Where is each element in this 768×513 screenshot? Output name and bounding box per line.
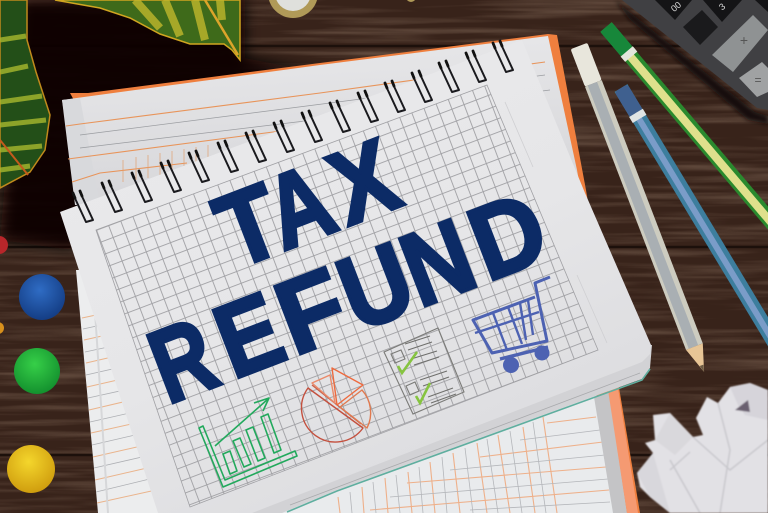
calculator: + [740, 32, 748, 48]
coin [268, 0, 318, 18]
heading: REFUND [134, 168, 562, 426]
calculator: 00 [669, 0, 683, 14]
heading: REFUND: D [454, 169, 562, 303]
heading: REFUND: U [323, 221, 429, 354]
pencil: white and grey [571, 43, 712, 375]
heading: TAX: T [201, 162, 297, 291]
icon: pie chart [301, 368, 371, 442]
candy: yellow [7, 445, 55, 493]
plant leaf left [0, 0, 50, 188]
calculator: = [754, 73, 762, 87]
pencil: green [600, 22, 768, 250]
crumpled paper [637, 383, 768, 513]
heading: REFUND: F [261, 246, 362, 377]
candy: blue [19, 274, 65, 320]
calculator: 3 [717, 1, 727, 12]
main notebook page [60, 40, 651, 513]
heading: REFUND: N [386, 196, 489, 329]
underlying page [62, 36, 600, 330]
heading: REFUND: R [134, 295, 231, 425]
bottom binding strip [594, 392, 627, 513]
small coin [406, 0, 416, 2]
heading: TAX: X [314, 116, 413, 247]
lower notebook [62, 34, 640, 513]
left lined sheet [76, 270, 175, 513]
candy: green [14, 348, 60, 394]
candy: orange [0, 322, 4, 334]
graph paper grid [96, 85, 598, 507]
heading: TAX [201, 116, 414, 291]
bottom graph sheet [270, 394, 626, 513]
pencil: blue [614, 84, 768, 349]
heading: TAX: A [250, 141, 350, 272]
page stack edge [100, 323, 652, 513]
ruled lines on underlying page [66, 62, 545, 182]
calculator [615, 0, 768, 124]
grid outline [96, 85, 598, 507]
bottom orange cover [608, 388, 638, 513]
plant leaf top [55, 0, 240, 60]
icon: green bar chart [199, 398, 297, 487]
icon: checklist [384, 328, 464, 414]
spiral binding coils [73, 41, 513, 222]
heading: REFUND: E [199, 269, 298, 400]
faint margin rules [505, 102, 607, 343]
candy: red [0, 236, 8, 254]
icon: shopping cart [473, 277, 550, 372]
orange cover [70, 34, 640, 513]
